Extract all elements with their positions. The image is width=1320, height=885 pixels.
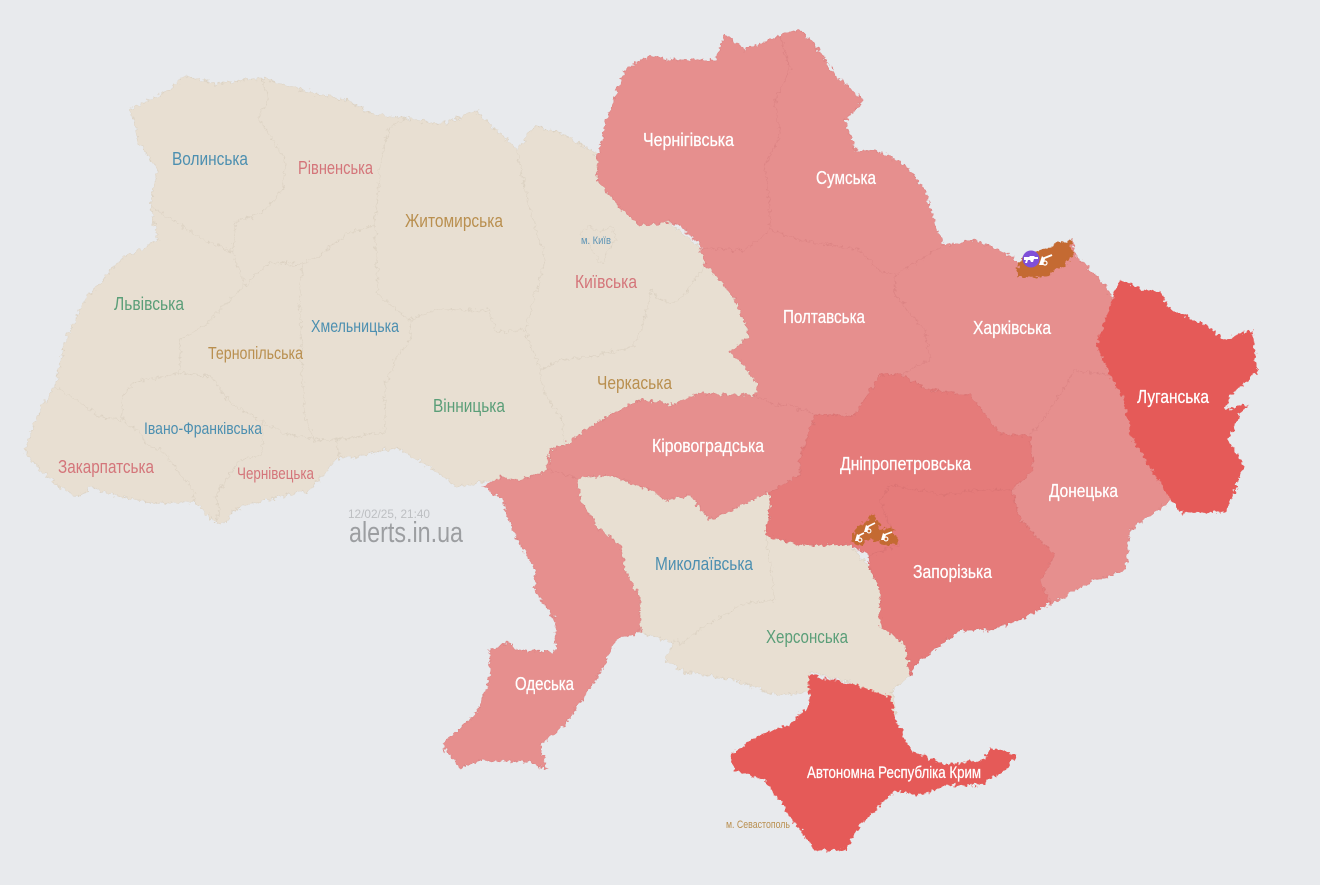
region: Zhytomyr xyxy=(375,110,545,332)
label: Kirovohrad: Кіровоградська xyxy=(652,435,765,456)
region: Lviv xyxy=(55,205,245,420)
icon: artillery Zaporizhzhia xyxy=(881,532,892,541)
region: Odesa xyxy=(442,470,640,770)
label: Chernivtsi: Чернівецька xyxy=(237,464,314,483)
region: Zakarpattia xyxy=(25,387,195,503)
region: Kherson xyxy=(665,535,910,715)
label: Ivano-Frankivsk: Івано-Франківська xyxy=(144,419,262,438)
region: Kyiv city xyxy=(580,226,617,265)
label: Sevastopol: м. Севастополь xyxy=(726,819,790,831)
threat area: Kharkiv border xyxy=(1017,240,1075,277)
region: Poltava xyxy=(700,230,930,415)
label: Rivne: Рівненська xyxy=(298,157,374,178)
region: Vinnytsia xyxy=(337,310,565,487)
region: Crimea xyxy=(730,675,1015,850)
region: Kyiv oblast xyxy=(517,125,705,370)
label: Kharkiv: Харківська xyxy=(973,317,1052,338)
label: Donetsk: Донецька xyxy=(1049,480,1119,501)
region: Kirovohrad xyxy=(548,392,815,520)
region: Volyn xyxy=(130,76,285,252)
region: Kharkiv xyxy=(895,240,1112,436)
region: Sumy xyxy=(765,30,945,275)
label: Cherkasy: Черкаська xyxy=(597,372,673,393)
label: Vinnytsia: Вінницька xyxy=(433,395,506,416)
region: Ternopil xyxy=(180,262,315,440)
region: Zaporizhzhia xyxy=(868,485,1055,675)
label: Kyiv oblast: Київська xyxy=(575,271,638,292)
label: Zakarpattia: Закарпатська xyxy=(58,456,155,477)
timestamp: 12/02/25, 21:40 xyxy=(348,507,430,521)
label: Kherson: Херсонська xyxy=(766,626,849,647)
icon: artillery Dnipropetrovsk centre xyxy=(864,523,875,533)
threat area: Dnipropetrovsk-Zaporizhzhia xyxy=(852,513,899,546)
region: Cherkasy xyxy=(540,265,757,447)
label: Kyiv city: м. Київ xyxy=(581,235,611,247)
label: Odesa: Одеська xyxy=(515,673,575,694)
region: Chernihiv xyxy=(597,35,790,250)
icon: artillery Kharkiv xyxy=(1039,255,1052,265)
region: Donetsk xyxy=(1012,370,1178,605)
region: Luhansk xyxy=(1097,280,1257,512)
label: Khmelnytskyi: Хмельницька xyxy=(311,316,399,336)
label: Ternopil: Тернопільська xyxy=(208,343,303,363)
label: Zhytomyr: Житомирська xyxy=(405,210,504,231)
label: Lviv: Львівська xyxy=(114,293,185,314)
region: Dnipropetrovsk xyxy=(765,375,1033,555)
region: Chernivtsi xyxy=(215,422,340,523)
label: Mykolaiv: Миколаївська xyxy=(655,553,754,574)
icon: purple assault rifle marker xyxy=(1022,250,1040,268)
label: Crimea: Автономна Республіка Крим xyxy=(807,764,981,782)
label: Luhansk: Луганська xyxy=(1137,386,1210,407)
label: Sumy: Сумська xyxy=(816,167,877,188)
label: Poltava: Полтавська xyxy=(783,306,866,327)
label: Dnipropetrovsk: Дніпропетровська xyxy=(840,453,972,474)
region: Mykolaiv xyxy=(578,475,775,645)
region: Ivano-Frankivsk xyxy=(122,373,262,523)
region: Khmelnytskyi xyxy=(300,225,410,440)
label: Zaporizhzhia: Запорізька xyxy=(913,561,993,582)
watermark: alerts.in.ua xyxy=(349,517,464,549)
label: Chernihiv: Чернігівська xyxy=(643,129,735,150)
label: Volyn: Волинська xyxy=(172,148,249,169)
icon: artillery Dnipropetrovsk west xyxy=(855,533,864,542)
region: Rivne xyxy=(232,78,405,285)
